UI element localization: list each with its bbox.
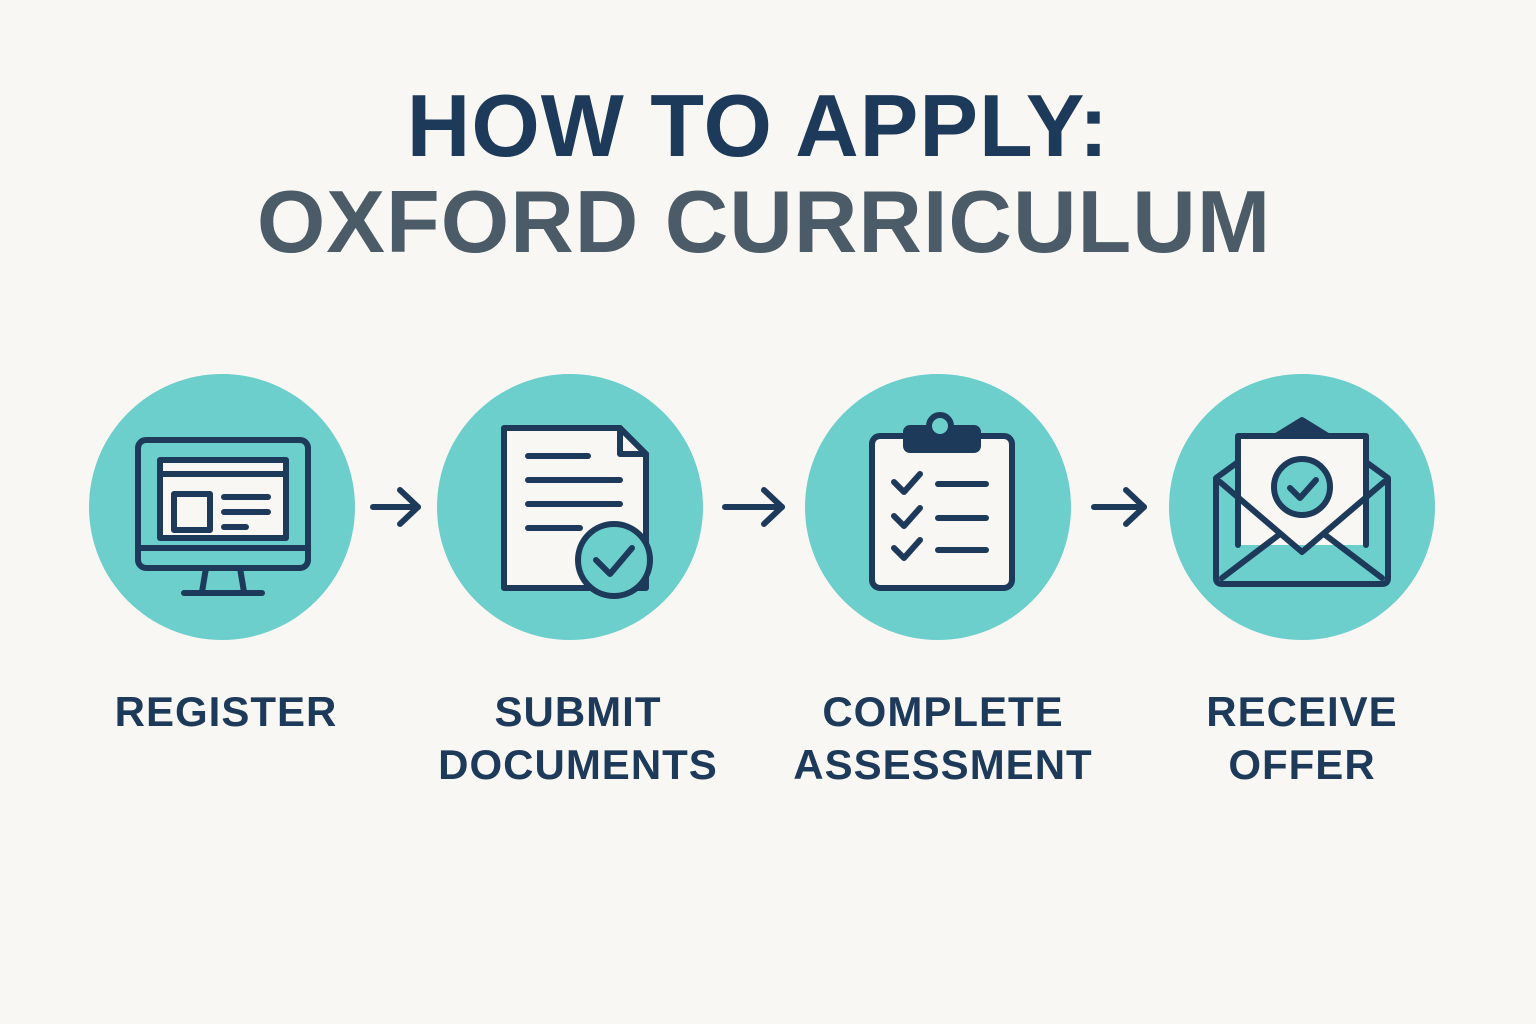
arrow 3: [1094, 490, 1144, 524]
label: submit documents: DOCUMENTS: [438, 741, 718, 788]
step 3 icon: clipboard checklist: [805, 374, 1071, 640]
label: submit documents: [438, 688, 718, 788]
label: register: REGISTER: [115, 688, 337, 735]
arrow 2: [725, 490, 782, 524]
step 1 icon: computer: [89, 374, 355, 640]
step 2 icon: document with check: [437, 374, 703, 640]
title line 1: HOW TO APPLY:: [407, 76, 1109, 175]
step 4 icon: envelope with letter: [1169, 374, 1435, 640]
label: complete assessment: ASSESSMENT: [793, 741, 1093, 788]
label: submit documents: SUBMIT: [494, 688, 662, 735]
label: complete assessment: [793, 688, 1093, 788]
label: complete assessment: COMPLETE: [822, 688, 1064, 735]
label: receive offer: RECEIVE: [1206, 688, 1398, 735]
arrow 1: [373, 490, 418, 524]
label: receive offer: OFFER: [1228, 741, 1376, 788]
label: receive offer: [1206, 688, 1398, 788]
title line 2: OXFORD CURRICULUM: [257, 172, 1271, 271]
